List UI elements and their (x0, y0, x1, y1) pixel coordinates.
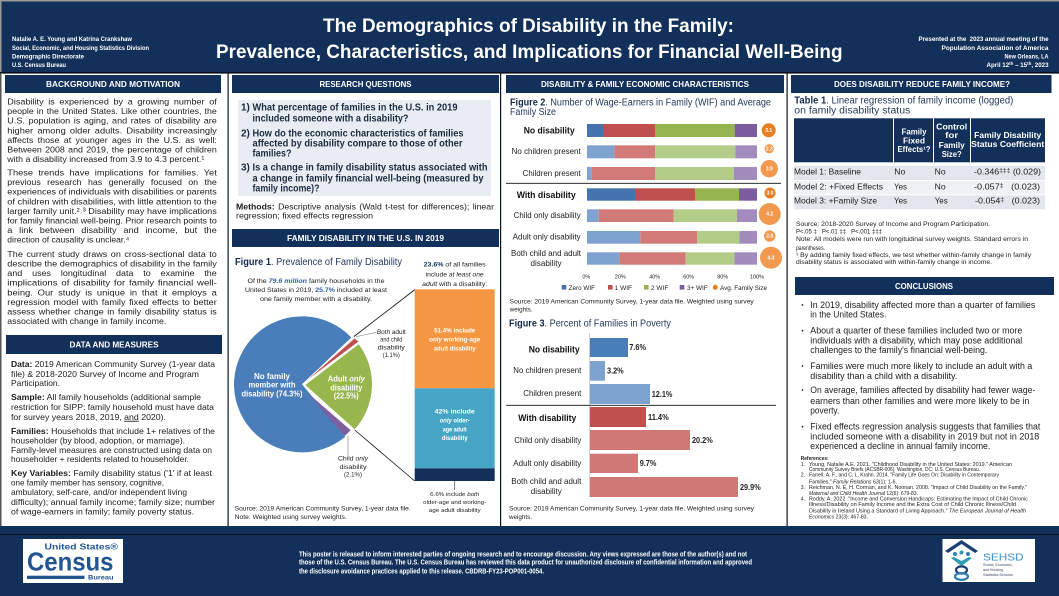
text block: data definitions: Sample: All family households (additional sample (11, 392, 201, 402)
logo: SEHSD: and Housing (983, 567, 1003, 572)
text block: data definitions: of wage-earners in family; family poverty status. (11, 506, 194, 516)
average family size bubbles: 4.2 (766, 212, 773, 218)
logo: U.S. Census Bureau (23, 539, 123, 583)
stack segment: older-age (435, 409, 475, 442)
title: The Demographics of Disability in the Family: (323, 16, 734, 37)
table header row: Family Disability (974, 131, 1042, 140)
disclaimer text (299, 552, 752, 576)
callout: numbered questions: families? (252, 149, 292, 160)
bar: adult only disability (590, 454, 656, 473)
conclusion bullet list: On average, families affected by disability had fewer wage- (810, 385, 1035, 395)
callout: numbered questions: a change in family financial well-being (measured by (252, 173, 484, 184)
row labels (511, 344, 582, 496)
table header row (794, 118, 1045, 162)
figure 2 source note: Source: 2019 American Community Survey, 1-year data file. Weighted using survey (510, 299, 755, 306)
presentation details (918, 36, 1049, 69)
table row: model 2: Yes (894, 182, 907, 191)
bar: with disability (590, 407, 669, 427)
references: Disability in Ireland Using a Standard of Living Approach." The European Journal of Health (809, 509, 1026, 515)
row: with disability (587, 188, 757, 201)
average family size bubbles: 2.8 (766, 234, 773, 240)
title: Prevalence, Characteristics, and Implications for Financial Well-Being (216, 42, 842, 63)
presentation details: Population Association of America (942, 45, 1049, 52)
pie label: adult only (328, 374, 365, 401)
x axis labels: 60% (683, 274, 694, 280)
stack segment: working-age: adult disability (434, 346, 476, 352)
text block: data definitions: Key Variables: Family disability status ('1' if at least (11, 468, 213, 478)
presentation details: April 12 (986, 62, 1009, 69)
conclusion bullet list: About a quarter of these families included two or more (810, 326, 1022, 336)
x axis labels: 80% (717, 274, 728, 280)
stack segment: working-age (429, 328, 481, 352)
table row: model 2: ‡ (1000, 183, 1004, 189)
pie label: both adult and child: Both adult (377, 329, 406, 336)
panel: disability and family economic characteristics (506, 75, 784, 521)
chart legend: Zero WIF (569, 285, 595, 292)
table 1 title: on family disability status (794, 106, 910, 116)
heading: does disability reduce family income (791, 75, 1052, 93)
pie label: both adult and child: (1.1%) (383, 352, 400, 359)
conclusion bullet list: poverty. (810, 406, 839, 416)
heading: economic characteristics: DISABILITY & FAMILY ECONOMIC CHARACTERISTICS (541, 79, 749, 89)
text block: background paragraphs: These trends have implications for families. Yet (7, 168, 217, 178)
heading: research questions (232, 75, 499, 93)
pie label: adult only: (22.5%) (334, 392, 359, 401)
row labels: Child only disability (514, 211, 581, 220)
stack segment: older-age: disability (442, 436, 468, 442)
pie label: child only (338, 456, 369, 478)
conclusion bullet list (802, 300, 1041, 451)
references: Maternal and Child Health Journal 12(6): 679-83. (809, 491, 918, 497)
panel: data and measures (6, 335, 222, 516)
stack segment label: both ages (423, 492, 486, 514)
row labels: No children present (512, 147, 582, 156)
disclaimer text: those of the U.S. Census Bureau. The U.S. Census Bureau has reviewed this data product for unauthorized disclosure of confidential information and approved (299, 560, 752, 566)
row: children present (587, 167, 757, 180)
text block: data definitions: file) & 2018-2020 Survey of Income and Program (11, 369, 199, 379)
stack segment: older-age: age adult (443, 427, 467, 433)
table row: model 1: No (935, 168, 946, 177)
table row: model 3: ‡ (1000, 198, 1004, 204)
bar: child only disability (590, 430, 713, 450)
bar: child only disability: 20.2% (692, 436, 713, 445)
heading: background and motivation: BACKGROUND AND MOTIVATION (46, 79, 180, 89)
figure 3 title: Figure 3. Percent of Families in Poverty (509, 318, 671, 330)
row labels: With disability (518, 413, 577, 424)
text block: data definitions: difficulty); annual family income; family size; number (11, 497, 215, 507)
stack segment label: both ages: age adult disability (429, 508, 481, 514)
references: 3. (801, 485, 805, 491)
text block: data definitions: householder (by blood, adoption, or marriage). (11, 436, 185, 446)
row: both child and adult disability (587, 252, 757, 265)
authors: Social, Economic, and Housing Statistics Division (12, 45, 149, 52)
row labels (511, 125, 582, 268)
presentation details: th (1009, 61, 1014, 66)
text block: background paragraphs: higher among older adults. Disability increasingly (7, 125, 218, 135)
conclusion bullet list: Families were much more likely to include an adult with a (810, 361, 1032, 371)
references: Illness/Disability on Family Income and the Extra Cost of Child Chronic Illness/Child (809, 502, 1016, 508)
text block: data definitions: Families: Households that include 1+ relatives of the (11, 426, 215, 436)
callout: numbered questions: 3) (241, 163, 250, 174)
pie label: no family member (242, 372, 303, 398)
callout: numbered questions (238, 100, 491, 196)
table notes: Note: All models were run with longitudinal survey weights. Standard errors in (796, 236, 1028, 243)
pie label: no family member: No family (254, 372, 291, 381)
table header row: Size? (942, 150, 962, 159)
conclusion bullet list: In 2019, disability affected more than a quarter of families (810, 300, 1036, 310)
callout: numbered questions: included someone with a disability? (252, 113, 408, 124)
table row: model 1: (0.029) (1010, 168, 1041, 177)
pie chart: family disability status (234, 290, 415, 481)
text block: data definitions: ambulatory, self-care, and/or independent living (11, 487, 187, 497)
text block: background paragraphs: implications of disability for family financial well- (7, 278, 217, 288)
pie label: adult only: disability (330, 383, 363, 392)
conclusion bullet list: in the United States. (810, 309, 886, 319)
table row: model 3 (794, 195, 1045, 209)
x axis labels: 100% (750, 274, 764, 280)
poster header banner (0, 0, 1059, 74)
figure 1 intro text (245, 278, 387, 303)
text block: methods (236, 202, 494, 220)
figure 2 title: Family Size (510, 107, 556, 118)
bar: both child and adult disability (590, 477, 761, 497)
heading: data and measures: DATA AND MEASURES (70, 340, 159, 350)
callout: numbered questions: 2) (241, 128, 250, 139)
panel: background and motivation (5, 75, 221, 326)
stack segment label: both ages: older-age and working- (423, 500, 486, 506)
heading: conclusions: CONCLUSIONS (895, 281, 953, 291)
row labels: disability (531, 487, 562, 496)
pie label: both adult and child: and child (380, 337, 403, 344)
text block: background paragraphs: regression model with family fixed effects to better (7, 297, 217, 307)
chart legend: 2 WIF (651, 285, 669, 292)
conclusion bullet list: earners than other families and were more likely to be in (810, 396, 1029, 406)
disclaimer text: the disclosure avoidance practices applied to this release. CBDRB-FY23-POP001-0054. (299, 568, 544, 576)
text block: background paragraphs: larger family unit.²˒³ Disability may have implications (7, 206, 217, 216)
table row: model 3: Model 3: +Family Size (794, 197, 878, 206)
text block: background paragraphs: being. Our study is unique in that it employs a (7, 287, 217, 297)
callout: numbered questions: Is a change in family disability status associated with (252, 163, 488, 174)
callout: numbered questions: How do the economic characteristics of families (252, 128, 464, 139)
text block: background paragraphs: direction of causality is unclear.⁴ (7, 235, 130, 245)
text block: background paragraphs: assess whether change in family disability status is (7, 306, 217, 316)
heading: family disability in the U.S. in 2019: FAMILY DISABILITY IN THE U.S. IN 2019 (287, 233, 444, 243)
table row: model 1: ‡‡‡ (999, 169, 1010, 175)
text block: background paragraphs: previous research has generally focused on the (7, 177, 217, 187)
figure 1 title: Figure 1. Prevalence of Family Disability (235, 257, 402, 268)
table notes: ¹ By adding family fixed effects, we test whether within-family change in family (796, 252, 1032, 259)
x axis labels: 0% (582, 274, 590, 280)
stack caption: 23.6% of all families (424, 263, 486, 269)
figure 3 source note: Source: 2019 American Community Survey, 1-year data file. Weighted using survey (509, 506, 755, 512)
presentation details: , 2023 (1031, 62, 1049, 69)
average family size bubbles: 2.3 (766, 146, 773, 152)
row labels: With disability (517, 190, 576, 201)
figure 2 title (510, 98, 771, 118)
bar: with disability: 11.4% (648, 413, 669, 422)
row labels: No disability (529, 344, 580, 355)
bar: no disability (590, 338, 646, 357)
text block: background paragraphs: Between 2008 and 2019, the percentage of children (7, 145, 217, 155)
table header row: Family (902, 128, 927, 136)
table row: model 3: (0.023) (1004, 197, 1040, 206)
heading: economic characteristics (506, 75, 784, 93)
chart legend: 3+ WIF (687, 285, 708, 292)
references: 1. (801, 462, 805, 468)
logo: SEHSD: SEHSD (983, 552, 1024, 564)
logo: SEHSD: Social, Economic, (983, 562, 1013, 567)
table row: model 3: -0.054 (975, 197, 998, 206)
stacked bar chart: wage-earners (506, 123, 782, 292)
table row: model 3: Yes (894, 197, 907, 206)
text block: methods: regression; fixed effects regression (236, 210, 373, 220)
stack caption (422, 263, 488, 288)
conclusion bullet list: included someone with a disability in 2019 but not in 2018 (810, 431, 1039, 441)
authors (12, 36, 149, 69)
x axis labels: 40% (649, 274, 660, 280)
figure 1 source note: Source: 2019 American Community Survey, 1-year data file. (235, 506, 411, 512)
table notes: Source: 2018-2020 Survey of Income and Program Participation. (796, 221, 990, 228)
row labels: Child only disability (514, 436, 581, 445)
logo: SEHSD: Statistics Division (983, 572, 1013, 577)
bar: adult only disability: 9.7% (640, 459, 656, 468)
disclaimer text: This poster is released to inform interested parties of ongoing research and to encourage discussion. Any views expressed are those of the author(s) and not (299, 552, 748, 558)
panel: research questions (232, 75, 499, 220)
references (801, 456, 1029, 521)
text block: background paragraphs: experiences of individuals with disabilities or parents (7, 187, 217, 197)
callout: numbered questions: affected by disability compare to those of other (252, 138, 463, 149)
pie label: child only: disability (340, 464, 368, 471)
stack segment: older-age: only older- (440, 418, 470, 424)
presentation details: Presented at the 2023 annual meeting of the (918, 36, 1049, 43)
figure 1 intro text: one family member with a disability. (260, 296, 372, 303)
row labels: Adult only disability (513, 459, 581, 468)
bar: children present (590, 384, 672, 404)
regression table (794, 118, 1045, 209)
title (216, 16, 842, 63)
average family size bubbles (759, 123, 782, 269)
text block: data definitions: for survey years 2018, 2019, and 2020). (11, 412, 166, 422)
text block: background paragraphs: describe the demographics of disability in the family (7, 259, 218, 269)
figure 1 source note (235, 506, 411, 521)
bar: no disability: 7.6% (629, 343, 646, 352)
figure 3 source note: weights. (508, 514, 532, 521)
table row: model 1: Model 1: Baseline (794, 168, 862, 177)
references: References: (801, 456, 829, 462)
figure 1 intro text: United States in 2019, 25.7% included at least (245, 287, 387, 294)
references: Families." Family Relations 63(1): 1-6. (809, 480, 897, 486)
authors: U.S. Census Bureau (12, 62, 66, 69)
average family size bubbles: 3.9 (766, 166, 773, 172)
chart legend: Avg. Family Size (720, 285, 768, 292)
heading: conclusions (795, 277, 1054, 295)
row labels: No children present (513, 366, 582, 375)
references: Community Survey Briefs (ACSBR-006). Washington, DC: U.S. Census Bureau. (809, 467, 980, 473)
stack segment: older-age: 42% include (435, 409, 475, 415)
stack segment label: both ages: 6.6% include both (430, 492, 479, 498)
text block: data definitions: restriction for SIPP: family household must have data (11, 402, 214, 412)
average family size bubbles: 4.3 (768, 255, 775, 261)
figure 2 source note: weights. (509, 307, 533, 314)
table row: model 1 (794, 166, 1045, 180)
heading: data and measures (6, 335, 222, 354)
row: child only disability (587, 209, 757, 222)
x axis labels: 20% (615, 274, 626, 280)
table row: model 2: -0.057 (974, 182, 997, 191)
text block: background paragraphs (6, 96, 218, 326)
callout: numbered questions: 1) (241, 102, 250, 113)
text block: background paragraphs: of children with disabilities, with little attention to the (7, 196, 217, 206)
pie label: both adult and child: disability (378, 344, 406, 351)
table row: model 2: No (935, 182, 946, 191)
references: Young, Natalie A.E. 2021. "Childhood Disability in the United States: 2019." American (809, 462, 1012, 468)
table row: model 1: No (894, 168, 906, 177)
row labels: Children present (523, 169, 582, 178)
table header row: Effects¹? (898, 145, 931, 154)
panel: does disability reduce family income (791, 75, 1052, 266)
references: 2. (801, 472, 805, 478)
bar: no children present: 3.2% (607, 366, 624, 376)
footer banner (0, 526, 1059, 596)
stack segment: working-age: only working-age (429, 337, 481, 343)
row labels: Both child and adult (511, 249, 582, 258)
references: Reichman, N. E, H. Corman, and K. Noonan. 2008. "Impact of Child Disability on the Family." (809, 485, 1027, 491)
text block: background paragraphs: associated with change in family income. (7, 316, 166, 326)
text block: data definitions: Family-level measures are constructed using data on (11, 445, 212, 455)
presentation details: New Orleans, LA (1004, 54, 1049, 60)
figure 3 source note (508, 506, 755, 521)
figure 2 title: Figure 2. Number of Wage-Earners in Family (WIF) and Average (510, 98, 771, 108)
row labels: Children present (523, 389, 582, 398)
table header row: Fixed (903, 136, 925, 145)
table row: model 3: Yes (935, 197, 948, 206)
text block: data definitions: one family member has sensory, cognitive, (11, 478, 164, 488)
table row: model 2: Model 2: +Fixed Effects (794, 182, 883, 191)
stack caption: include at least one (426, 272, 484, 278)
callout: numbered questions: family income)? (252, 184, 320, 195)
authors: Natalie A. E. Young and Katrina Crankshaw (12, 36, 132, 43)
pie label: adult only: Adult only (328, 374, 365, 383)
row labels: No disability (524, 125, 575, 136)
average family size bubbles: 3.1 (765, 128, 772, 134)
presentation details: th (1027, 61, 1032, 66)
conclusion bullet list: experienced a decline in annual family income. (810, 441, 990, 451)
conclusion bullet list: individuals with a disability, which may pose additional (810, 335, 1022, 345)
text block: background paragraphs: people in the United States. Like other countries, the (7, 106, 217, 116)
conclusion bullet list: challenges to the family's financial well-being. (810, 345, 987, 355)
figure 2 source note (509, 299, 755, 314)
presentation details: – 15 (1013, 62, 1028, 69)
table row: model 1: -0.346 (974, 168, 997, 177)
text block: background paragraphs: with a disability increased from 3.9 to 4.3 percent.¹ (6, 154, 204, 164)
row: adult only disability (587, 231, 757, 244)
text block: data definitions: householder + residents related to householder. (11, 454, 189, 464)
x axis labels (582, 274, 764, 280)
text block: background paragraphs: affects those at younger ages in the U.S. as well: (7, 135, 217, 145)
table notes: P<.05 ‡ P<.01 ‡‡ P<.001 ‡‡‡ (796, 228, 882, 236)
table row: model 2 (794, 181, 1045, 194)
references: Roddy, A. 2022. "Income and Conversion Handicaps: Estimating the Impact of Child Chronic (809, 496, 1029, 502)
references: Economics 23(3): 467-83. (809, 515, 868, 521)
table header row: for (945, 131, 958, 140)
text block: background paragraphs: for family financial well-being. Prior research points to (7, 216, 217, 226)
logo: U.S. Census Bureau: Bureau (88, 575, 114, 582)
figure 1 intro text: Of the 79.6 million family households in the (248, 278, 385, 285)
row: no children present (587, 145, 757, 158)
stacked column: adult disability breakdown (415, 263, 495, 514)
panel: conclusions (795, 277, 1054, 521)
table header row: Control (936, 123, 967, 132)
conclusion bullet list: disability than a child with a disability. (810, 371, 957, 381)
table notes (796, 221, 1032, 266)
bar chart: percent of families in poverty (506, 333, 776, 497)
bar: no children present (590, 361, 624, 381)
bar: both child and adult disability: 29.9% (740, 483, 761, 492)
pie label: both adult and child (377, 329, 406, 359)
references: Farrell, A. F., and C. L. Krahn. 2014. "Family Life Goes On: Disability in Contemporary (809, 472, 999, 478)
bar: children present: 12.1% (652, 390, 672, 399)
row labels: Both child and adult (511, 477, 582, 486)
heading: background and motivation (5, 75, 221, 93)
stack caption: adult with a disability: (422, 282, 488, 288)
table 1 title (794, 96, 1013, 116)
pie label: no family member: member with (248, 380, 296, 389)
logo: U.S. Census Bureau: United States® (44, 542, 119, 552)
average family size bubbles: 3.0 (767, 191, 774, 197)
heading: does disability reduce family income: DOES DISABILITY REDUCE FAMILY INCOME? (834, 79, 1010, 89)
table 1 title: Table 1. Linear regression of family income (logged) (794, 96, 1013, 106)
logo: SEHSD (942, 539, 1035, 582)
chart legend: 1 WIF (615, 285, 632, 292)
chart legend (562, 285, 768, 292)
figure 1 source note: Note: Weighted using survey weights. (235, 514, 347, 521)
panel: family disability in 2019 (232, 229, 499, 521)
table header row: Status Coefficient (971, 140, 1045, 149)
pie label: child only: Child only (338, 456, 369, 463)
table notes: parentheses. (796, 245, 825, 252)
text block: data definitions (11, 359, 215, 516)
text block: data definitions: Participation. (11, 378, 60, 388)
text block: background paragraphs: U.S. population is aging, and rates of disability are (7, 116, 217, 126)
text block: background paragraphs: and uses longitudinal data to examine the (7, 268, 217, 278)
callout: numbered questions: What percentage of families in the U.S. in 2019 (252, 102, 458, 113)
text block: data definitions: Data: 2019 American Community Survey (1-year data (11, 359, 215, 369)
table row: model 2: (0.023) (1004, 182, 1040, 191)
heading: research questions: RESEARCH QUESTIONS (320, 79, 412, 89)
text block: background paragraphs: a link between disability and income, but the (7, 225, 217, 235)
text block: background paragraphs: The current study draws on cross-sectional data to (7, 249, 217, 259)
row: no disability (587, 124, 757, 137)
table notes: disability status is associated with within-family change in income. (796, 259, 992, 266)
logo: U.S. Census Bureau: Census (27, 546, 114, 576)
text block: methods: Methods: Descriptive analysis (Wald t-test for differences); linear (236, 202, 494, 212)
table header row: Family (939, 141, 965, 150)
references: 4. (801, 496, 805, 502)
row labels: Adult only disability (513, 233, 581, 242)
pie label: child only: (2.1%) (344, 471, 362, 478)
row labels: disability (530, 259, 562, 268)
text block: background paragraphs: Disability is experienced by a growing number of (7, 96, 217, 106)
stack segment: working-age: 51.4% include (434, 328, 476, 334)
authors: Demographic Directorate (12, 54, 85, 60)
heading: family disability in the U.S. in 2019 (232, 229, 499, 247)
pie label: no family member: disability (74.3%) (242, 389, 303, 398)
conclusion bullet list: Fixed effects regression analysis suggests that families that (810, 422, 1041, 432)
